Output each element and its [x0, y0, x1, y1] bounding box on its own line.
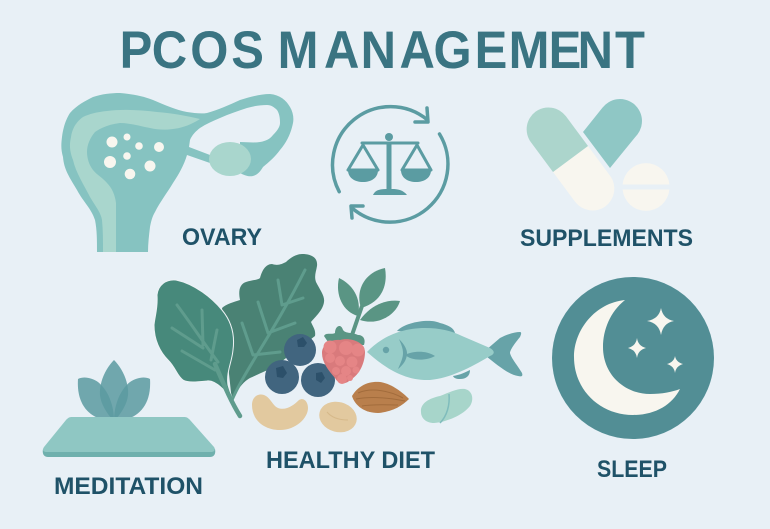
- panel: ovary: [61, 93, 293, 252]
- icon: uterus and ovary: [61, 93, 293, 252]
- panel: meditation: [43, 360, 215, 500]
- icon: moon circle: [552, 277, 714, 439]
- icon: fish: [367, 321, 522, 380]
- panel: healthy diet: [154, 254, 522, 474]
- icon: peanut: [316, 398, 360, 436]
- panel: sleep: [552, 277, 714, 483]
- icon: kale leaf: [222, 254, 324, 402]
- icon: balance scale with cycle arrows: [333, 107, 448, 222]
- icon: tablet: [623, 163, 669, 211]
- icon: spinach leaf: [154, 280, 240, 416]
- label: meditation: MEDITATION: [54, 473, 203, 500]
- label: healthy diet: HEALTHY DIET: [266, 447, 435, 474]
- icon: yoga mat: [43, 417, 215, 457]
- title: PCOS MANAGEMENT: [120, 20, 645, 79]
- label: sleep: SLEEP: [597, 456, 667, 483]
- icon: capsule: [518, 99, 623, 219]
- label: ovary: OVARY: [182, 224, 262, 251]
- label: supplements: SUPPLEMENTS: [520, 225, 693, 252]
- icon: heart capsule: [583, 99, 642, 168]
- icon: lotus: [78, 360, 150, 421]
- panel: supplements: [518, 99, 693, 252]
- icon: almond: [352, 382, 409, 413]
- icon: herb sprig: [338, 268, 400, 335]
- icon: raspberry: [322, 326, 365, 384]
- icon: seed: [421, 389, 472, 423]
- icon: cashew: [252, 394, 308, 430]
- icon: blueberries: [265, 334, 335, 397]
